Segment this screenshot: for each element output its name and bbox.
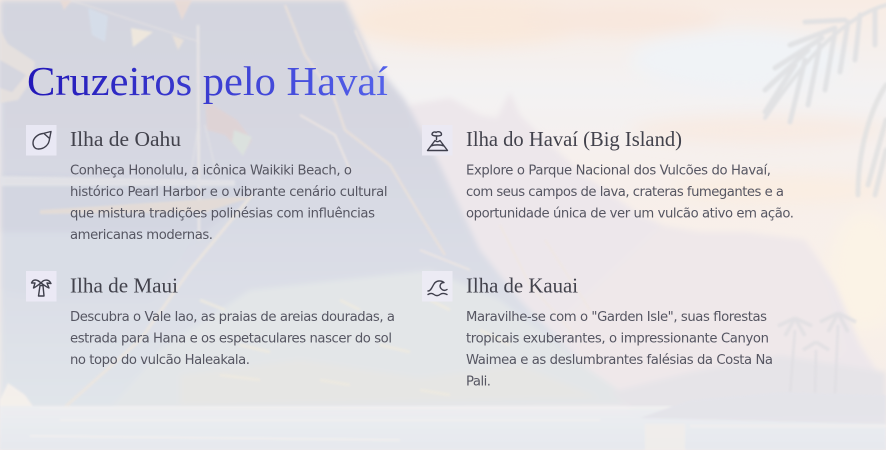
description: Conheça Honolulu, a icônica Waikiki Beach, o bbox=[70, 162, 352, 178]
item: Ilha de Oahu bbox=[26, 125, 388, 243]
icon: palm tree bbox=[26, 271, 56, 302]
description: que mistura tradições polinésias com influências bbox=[70, 206, 375, 222]
description: estrada para Hana e os espetaculares nascer do sol bbox=[70, 332, 392, 346]
description bbox=[466, 310, 773, 390]
description: Maravilhe-se com o "Garden Isle", suas florestas bbox=[466, 310, 767, 325]
description: Descubra o Vale Iao, as praias de areias douradas, a bbox=[70, 310, 395, 325]
palm fronds bbox=[765, 5, 886, 122]
description bbox=[70, 310, 395, 368]
description: no topo do vulcão Haleakala. bbox=[70, 353, 250, 368]
description bbox=[466, 162, 794, 222]
item: Ilha de Maui bbox=[26, 271, 395, 368]
description: americanas modernas. bbox=[70, 228, 213, 243]
description: histórico Pearl Harbor e o vibrante cenário cultural bbox=[70, 184, 388, 200]
item: Ilha do Havaí bbox=[422, 125, 794, 222]
description: Waimea e as deslumbrantes falésias da Costa Na bbox=[466, 352, 773, 368]
heading: Ilha do Havaí (Big Island) bbox=[466, 127, 682, 151]
description bbox=[70, 162, 388, 243]
description: Pali. bbox=[466, 374, 491, 390]
description: Explore o Parque Nacional dos Vulcões do Havaí, bbox=[466, 162, 771, 178]
description: oportunidade única de ver um vulcão ativo em ação. bbox=[466, 206, 794, 222]
icon: Oahu island bbox=[26, 125, 56, 156]
description: tropicais exuberantes, o impressionante Canyon bbox=[466, 332, 769, 346]
heading: Ilha de Oahu bbox=[70, 127, 181, 151]
icon: wave bbox=[422, 271, 452, 302]
item: Ilha de Kauai bbox=[422, 271, 773, 390]
description: com seus campos de lava, crateras fumegantes e a bbox=[466, 185, 784, 200]
title: Cruzeiros pelo Havaí bbox=[27, 58, 388, 104]
icon: volcano bbox=[422, 125, 452, 156]
heading: Ilha de Maui bbox=[70, 274, 178, 298]
heading: Ilha de Kauai bbox=[466, 274, 578, 298]
